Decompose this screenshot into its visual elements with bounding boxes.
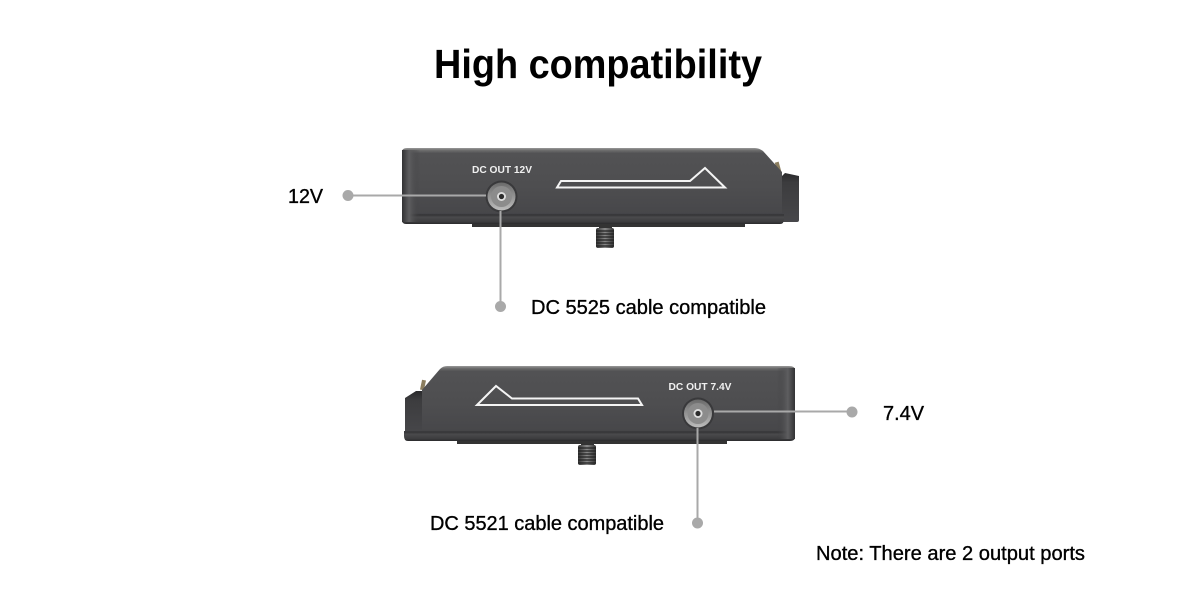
callout: DC 5521 cable: DC 5521 cable compatible <box>430 513 664 535</box>
callout: 7.4V: 7.4V <box>883 403 925 425</box>
port: 7.4V <box>682 398 714 430</box>
label: DC OUT 7.4V: DC OUT 7.4V <box>668 382 732 393</box>
callout: DC 5525 cable: DC 5525 cable compatible <box>531 297 766 319</box>
logo outline <box>557 168 725 188</box>
bracket: left mount <box>405 391 424 434</box>
title: High compatibility <box>434 41 762 87</box>
screw <box>578 443 596 465</box>
callout: 12V: 12V <box>288 186 324 208</box>
device body <box>402 148 784 224</box>
callout: 7.4V <box>714 403 925 425</box>
screw <box>596 226 614 248</box>
bottom strip <box>457 440 727 444</box>
device: top view with 12V port <box>402 148 799 248</box>
callout: DC 5525 cable <box>495 211 766 319</box>
port: 12V <box>486 180 518 212</box>
pin: top brass <box>775 162 781 172</box>
label: DC OUT 12V: DC OUT 12V <box>472 165 532 176</box>
logo outline <box>477 386 642 405</box>
pin: top brass <box>420 380 426 390</box>
device body <box>404 366 795 441</box>
callout: 12V <box>288 186 486 208</box>
bottom strip <box>472 223 745 227</box>
bracket: right mount <box>780 173 799 222</box>
device: bottom view with 7.4V port <box>404 366 795 465</box>
note: Note: There are 2 output ports <box>816 543 1085 565</box>
callout: DC 5521 cable <box>430 428 703 535</box>
